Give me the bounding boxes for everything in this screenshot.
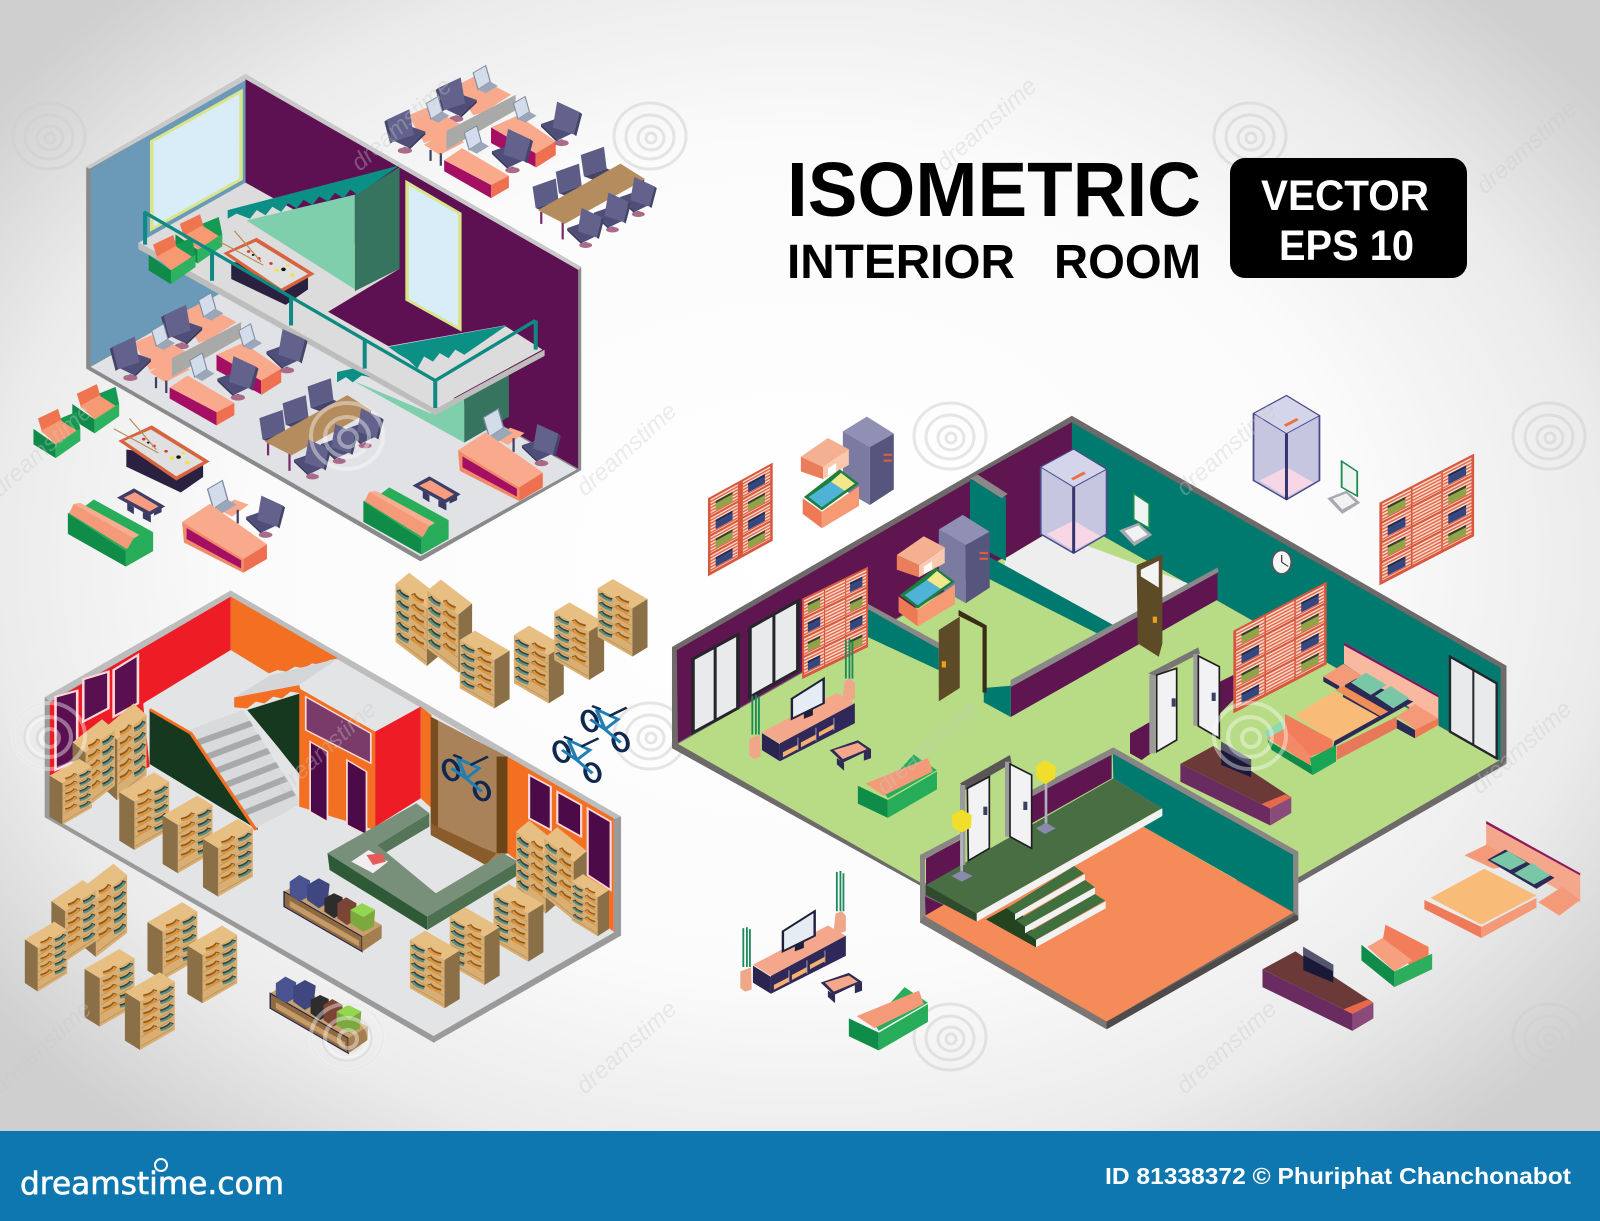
railing <box>144 212 536 408</box>
wall bike <box>442 755 491 801</box>
watermark text: dreamstime <box>1471 96 1582 199</box>
title <box>787 147 1201 289</box>
watermark overlay spirals <box>13 403 1286 1070</box>
partition teal upper <box>970 479 1006 561</box>
kitchen set solo <box>801 417 894 528</box>
meeting table outside room <box>533 147 657 248</box>
logo: dreamstime.com <box>20 1166 284 1202</box>
shower in room <box>1041 449 1107 553</box>
credit: ID 81338372 © Phuriphat Chanchonabot <box>1105 1163 1571 1189</box>
door left <box>939 610 987 701</box>
door right <box>1137 554 1162 657</box>
shelves outside shop, top <box>396 573 648 708</box>
purple back wall <box>246 79 578 468</box>
watermark text: dreamstime <box>346 73 457 176</box>
long purple partition <box>1011 570 1218 717</box>
watermark text: dreamstime <box>1171 398 1282 501</box>
partition pieces <box>1130 720 1153 760</box>
scene: apartment <box>672 396 1580 1050</box>
steps <box>986 866 1106 947</box>
red shelf left room <box>802 567 868 679</box>
rim pieces <box>920 834 960 922</box>
shelves outside shop, bottom <box>25 864 237 1050</box>
tv console in bedroom <box>1180 742 1291 826</box>
right wall windows <box>529 775 611 890</box>
subheading: interior: INTERIOR <box>787 236 1015 289</box>
orange pillar with doors <box>299 688 375 835</box>
teal back wall <box>1072 422 1500 760</box>
dark stair wall right <box>247 693 301 777</box>
rim <box>45 591 621 819</box>
subheading: room: ROOM <box>1054 236 1201 289</box>
purple back wall <box>677 422 1072 742</box>
floor lamp right <box>1036 760 1056 834</box>
kitchen set in room <box>897 515 990 626</box>
watermark spirals <box>13 103 1585 1070</box>
bicycles <box>552 706 630 783</box>
orange floor <box>923 827 1293 1022</box>
lower mint wall <box>353 381 464 443</box>
display table in shop <box>284 875 382 952</box>
floor lamp left <box>952 809 973 882</box>
bedroom area <box>1130 582 1497 775</box>
purple entry wall left <box>926 840 960 885</box>
window: tall left <box>152 91 241 229</box>
red shelf solo left <box>708 463 773 576</box>
shelves in shop <box>50 703 609 1008</box>
heading: isometric: ISOMETRIC <box>787 147 1201 233</box>
bedroom double doors <box>1148 647 1219 753</box>
tv console solo <box>1262 947 1373 1031</box>
purple entry wall right <box>1032 752 1112 823</box>
meeting table in room <box>259 378 384 479</box>
sofa and coffee table in room <box>363 476 461 555</box>
armchair solo <box>1361 925 1432 987</box>
counter <box>327 803 518 930</box>
scene: bike shop <box>25 573 648 1053</box>
footer bar <box>0 1131 1600 1221</box>
kitchen partition <box>867 608 939 670</box>
stair side wall left <box>150 709 258 830</box>
bed solo <box>1424 821 1580 938</box>
display table outside <box>270 977 368 1053</box>
blue left wall <box>91 80 246 366</box>
watermark text: dreamstime <box>931 73 1042 176</box>
upper mint wall <box>246 195 355 289</box>
rim bottom <box>920 913 1107 1029</box>
windows <box>693 601 798 733</box>
watermark text: dreamstime <box>571 996 682 1099</box>
office floor <box>91 279 577 556</box>
clock <box>1272 551 1291 574</box>
platform <box>926 778 1162 913</box>
bedroom window <box>1450 657 1497 758</box>
red wall left <box>50 597 231 817</box>
bookshelf in bedroom <box>1233 582 1327 713</box>
office desks in room <box>110 293 308 425</box>
sink and mirror solo <box>1327 461 1360 514</box>
lower stairs <box>388 326 507 369</box>
teal entry wall <box>1113 752 1293 912</box>
window: tall right <box>407 183 460 329</box>
green floor <box>678 518 1499 884</box>
badge: vector eps 10: EPS 10 <box>1279 222 1414 270</box>
armchairs upper <box>149 214 222 284</box>
apartment shell <box>672 416 1506 1028</box>
armchairs outside room <box>33 384 119 458</box>
upper stairs <box>228 165 400 219</box>
mezzanine floor <box>138 183 542 408</box>
pool table outside room <box>114 419 210 493</box>
lower small stairs <box>337 369 371 382</box>
sofa and table outside room <box>68 488 165 567</box>
watermark text: dreamstime <box>1171 996 1282 1099</box>
bed with sofa <box>1265 643 1438 775</box>
entry double doors <box>960 755 1032 865</box>
orange right wall <box>507 757 614 932</box>
left wall windows <box>56 655 138 770</box>
pool table upper <box>219 231 315 305</box>
red pillar <box>375 707 421 827</box>
bathroom floor <box>1005 532 1188 630</box>
red shelf solo right <box>1379 454 1474 585</box>
sink in room <box>1119 493 1152 546</box>
upper green wall <box>355 167 400 291</box>
top rim <box>86 74 581 270</box>
orange wall <box>231 597 338 673</box>
mezzanine edge <box>138 242 545 415</box>
watermark text: dreamstime <box>571 398 682 501</box>
badge: vector eps 10: VECTOR <box>1261 172 1429 220</box>
shop shell <box>45 591 621 1043</box>
main staircase <box>150 709 301 830</box>
partition teal lower <box>989 556 1113 641</box>
watermark text: dreamstime <box>871 696 982 799</box>
watermark text: dreamstime <box>271 696 382 799</box>
watermark text: dreamstime <box>1466 696 1577 799</box>
scene: two-storey office room <box>33 65 657 573</box>
lower green wall <box>464 374 509 443</box>
office room shell <box>86 74 581 561</box>
bathroom purple wall <box>975 422 1072 559</box>
desk and chair outside room <box>182 481 285 573</box>
shop floor <box>51 597 614 1036</box>
living furniture in room <box>749 638 937 818</box>
brown panel <box>431 717 507 865</box>
shower solo <box>1254 396 1319 500</box>
upper stair zigzag <box>234 685 301 708</box>
office set outside room <box>384 65 582 198</box>
desk with chair in room <box>458 409 561 501</box>
partition end <box>984 686 1011 717</box>
living furniture solo <box>740 871 928 1050</box>
badge: vector eps 10 <box>1230 158 1467 278</box>
entry hall <box>920 747 1298 1029</box>
